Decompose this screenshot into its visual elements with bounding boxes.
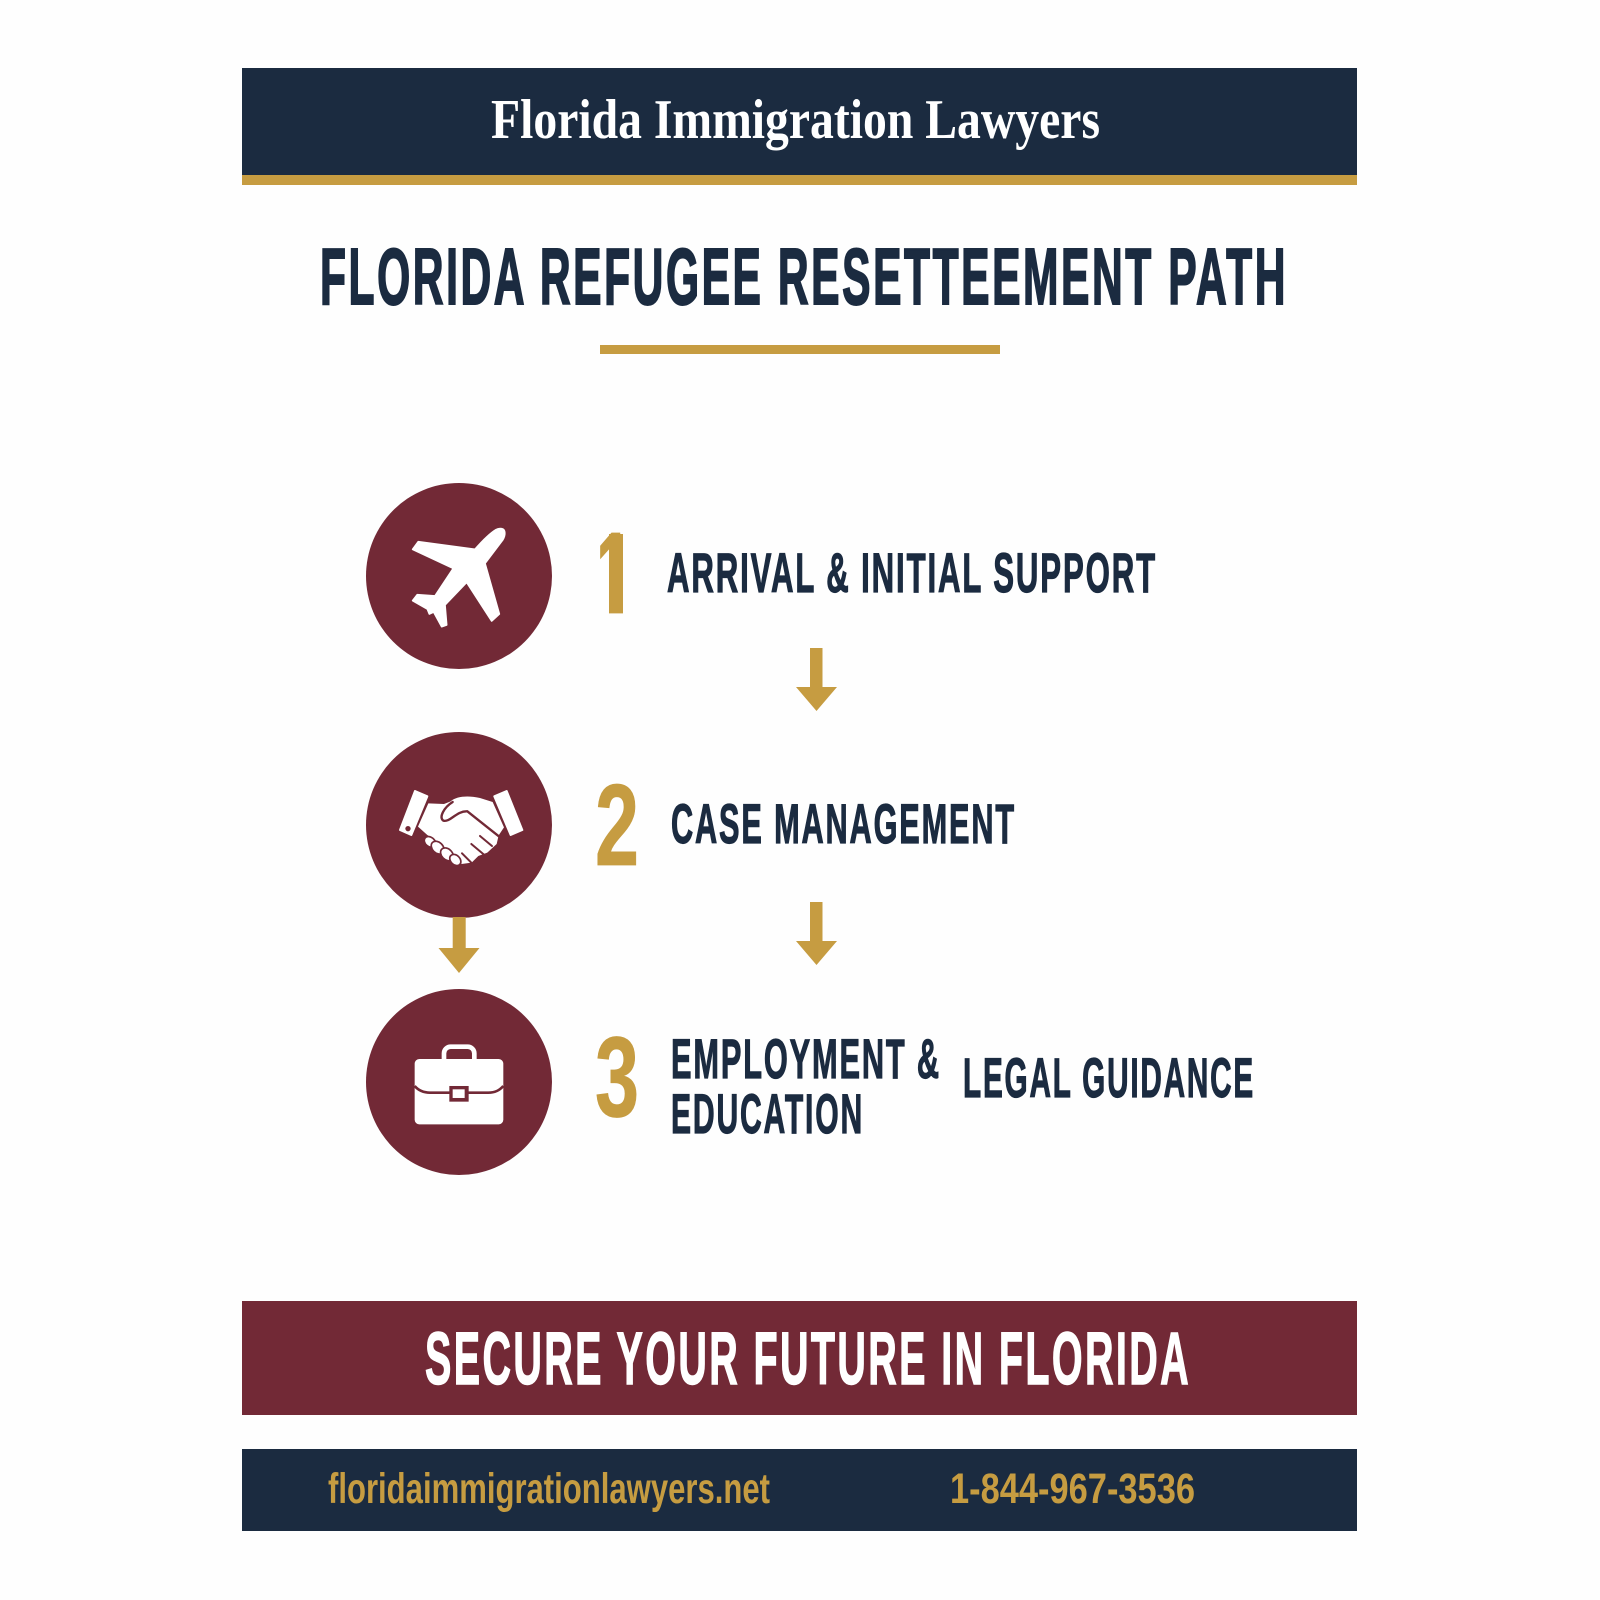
arrow: step 2 to step 3 (right) [796, 902, 837, 965]
arrow: step 1 to step 2 [796, 648, 837, 711]
step 3 icon: briefcase in maroon circle [366, 989, 552, 1175]
step 2 icon: handshake in maroon circle [366, 732, 552, 918]
step 1 number: 1 [596, 508, 632, 638]
arrow: step 2 to step 3 (left) [438, 917, 480, 973]
step 1 icon: airplane in maroon circle [366, 483, 552, 669]
phone number: 1-844-967-3536 [950, 1465, 1195, 1513]
title underline [600, 345, 1000, 354]
step 3 label: EMPLOYMENT & [671, 1027, 941, 1090]
step 3 label: EDUCATION [671, 1082, 864, 1145]
website: floridaimmigrationlawyers.net [328, 1465, 770, 1513]
legal guidance label: LEGAL GUIDANCE [963, 1046, 1255, 1109]
step 1 number [586, 508, 639, 638]
step 1 label: ARRIVAL & INITIAL SUPPORT [667, 541, 1157, 604]
call-to-action banner [242, 1301, 1357, 1415]
header band [242, 68, 1357, 185]
step 3 number: 3 [595, 1014, 639, 1141]
step 2 label: CASE MANAGEMENT [671, 792, 1016, 855]
step 3 label [671, 1027, 941, 1145]
firm name: Florida Immigration Lawyers [491, 89, 1100, 151]
contact footer [242, 1449, 1357, 1531]
step 2 number: 2 [595, 760, 639, 890]
